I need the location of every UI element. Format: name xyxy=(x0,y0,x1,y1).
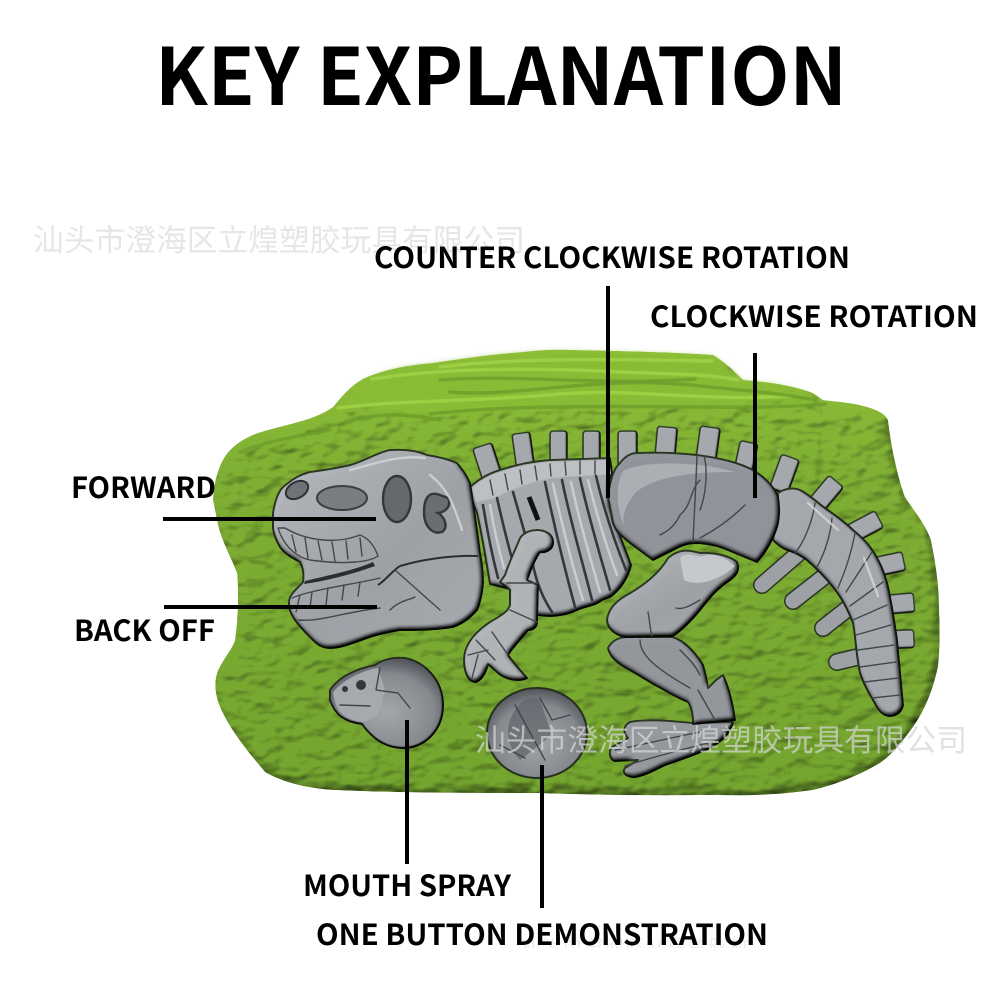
tail xyxy=(773,489,903,716)
right egg with embryo xyxy=(487,688,587,778)
watermark: bottom, behind caption: 汕头市澄海区立煌塑胶玩 xyxy=(520,926,750,958)
callout: mouth spray: MOUTH SPRAY xyxy=(303,863,512,905)
rear thigh xyxy=(607,551,738,637)
top smooth ledge of the rock xyxy=(345,353,810,416)
front arm and hand xyxy=(464,530,553,682)
callout: back off xyxy=(74,605,377,650)
teeth and jaw lines xyxy=(278,457,478,620)
callout: clockwise rotation xyxy=(650,294,978,498)
rib cage xyxy=(470,458,631,616)
callout: one button demonstration xyxy=(316,765,768,954)
callout: mouth spray xyxy=(303,720,512,905)
callout: forward xyxy=(71,465,376,521)
lower tail spines xyxy=(762,552,866,662)
callout: counter clockwise rotation xyxy=(374,235,850,498)
rear lower leg xyxy=(608,637,735,724)
hip bone xyxy=(608,453,779,562)
watermark: top left: 汕头市澄海区立煌塑胶玩具有限公司 xyxy=(33,215,525,260)
ledge ridges xyxy=(240,360,825,452)
callout: one button demonstration: ONE BUTTON DEMONSTRATION xyxy=(316,912,768,954)
left egg with hatchling xyxy=(330,658,443,748)
callout: back off: BACK OFF xyxy=(74,608,215,650)
callout: counter clockwise rotation: COUNTER CLOCKWISE ROTATION xyxy=(374,235,850,277)
watermark: over the toy: 汕头市澄海区立煌塑胶玩具有限公司 xyxy=(475,715,967,760)
rear foot xyxy=(610,720,733,777)
callout: forward: FORWARD xyxy=(71,465,216,507)
dinosaur fossil toy remote xyxy=(213,350,940,795)
skull openings xyxy=(283,476,449,533)
rear leg details xyxy=(615,554,735,766)
back spines xyxy=(473,426,915,648)
callout: clockwise rotation: CLOCKWISE ROTATION xyxy=(650,294,978,336)
title: KEY EXPLANATION xyxy=(155,13,847,128)
skull xyxy=(273,450,483,648)
panel: green rock body xyxy=(213,350,940,795)
